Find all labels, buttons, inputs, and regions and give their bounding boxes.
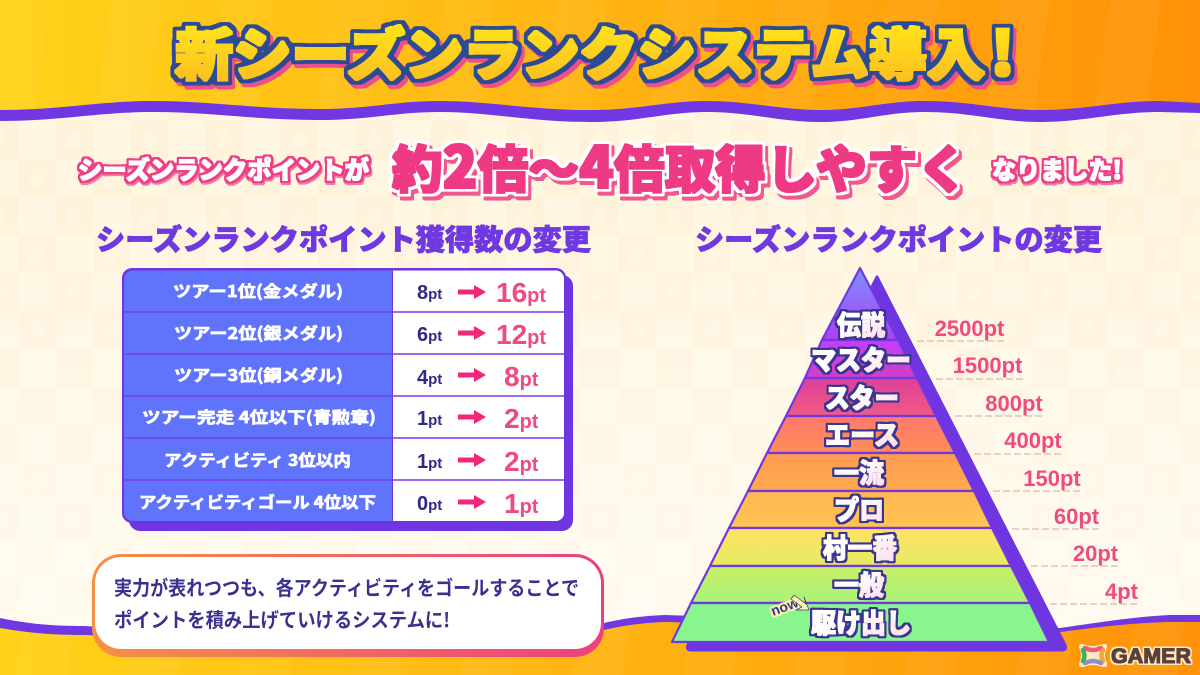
logo wordmark: GAMER [1111, 645, 1191, 668]
row labels [139, 278, 376, 513]
pyramid chart [672, 268, 1066, 650]
row labels: ツアー3位(銅メダル) [174, 362, 343, 386]
now marker: now [769, 594, 800, 619]
subhead: right part: なりました! [992, 151, 1122, 187]
new point values: 2pt [504, 446, 539, 477]
new point values: 2pt [504, 403, 539, 434]
heading: points earned: シーズンランクポイント獲得数の変更 [96, 217, 591, 259]
subhead: big emphasis: 約2倍～4倍取得しやすく [392, 121, 968, 205]
rank labels: 一般 [834, 564, 884, 603]
point thresholds: 20pt [1073, 541, 1119, 566]
new point values: 16pt [496, 277, 546, 308]
point thresholds: 150pt [1023, 466, 1081, 491]
new point values: 1pt [504, 488, 539, 519]
point thresholds: 1500pt [953, 353, 1023, 378]
row labels: アクティビティゴール 4位以下 [139, 489, 376, 513]
rank labels: スター [825, 377, 899, 416]
row labels: アクティビティ 3位以内 [164, 447, 351, 471]
rank labels: プロ [834, 489, 884, 528]
rank labels: エース [825, 414, 899, 453]
point thresholds: 2500pt [935, 316, 1005, 341]
previous point values [417, 282, 442, 515]
arrows [458, 285, 486, 509]
new point values [496, 277, 546, 519]
bottom band with wavy purple edge [0, 615, 1200, 675]
pyramid shadow [687, 277, 1066, 650]
point thresholds [917, 316, 1139, 604]
rank labels: 一流 [834, 452, 884, 491]
previous point values: 1pt [417, 451, 442, 473]
previous point values: 0pt [417, 493, 442, 515]
callout text: ポイントを積み上げていけるシステムに! [114, 604, 450, 633]
new point values: 8pt [504, 361, 539, 392]
logo icon [1080, 645, 1106, 666]
top banner with wavy purple edge [0, 0, 1200, 122]
previous point values: 8pt [417, 282, 442, 304]
point thresholds: 800pt [985, 391, 1043, 416]
point thresholds: 400pt [1004, 428, 1062, 453]
heading: rank points: シーズンランクポイントの変更 [695, 217, 1102, 259]
row labels: ツアー完走 4位以下(青勲章) [142, 404, 376, 428]
callout box [92, 554, 604, 657]
pyramid bands [672, 268, 1049, 642]
callout text [114, 572, 579, 633]
rank labels [811, 304, 911, 641]
GAMER logo [1080, 645, 1191, 668]
previous point values: 4pt [417, 367, 442, 389]
previous point values: 6pt [417, 324, 442, 346]
rank labels: 村一番 [823, 527, 897, 566]
row labels: ツアー1位(金メダル) [173, 278, 343, 302]
point thresholds: 4pt [1105, 579, 1139, 604]
panel: points table [122, 268, 573, 531]
rank labels: 駆け出し [811, 602, 911, 641]
callout text: 実力が表れつつも、各アクティビティをゴールすることで [114, 572, 579, 601]
subhead: left part: シーズンランクポイントが [78, 151, 369, 187]
rank labels: 伝説 [837, 304, 885, 343]
rank labels: マスター [811, 339, 911, 378]
new point values: 12pt [496, 319, 546, 350]
previous point values: 1pt [417, 408, 442, 430]
row labels: ツアー2位(銀メダル) [174, 320, 343, 344]
title: 新シーズンランクシステム導入 ! [175, 6, 1015, 93]
point thresholds: 60pt [1054, 504, 1100, 529]
